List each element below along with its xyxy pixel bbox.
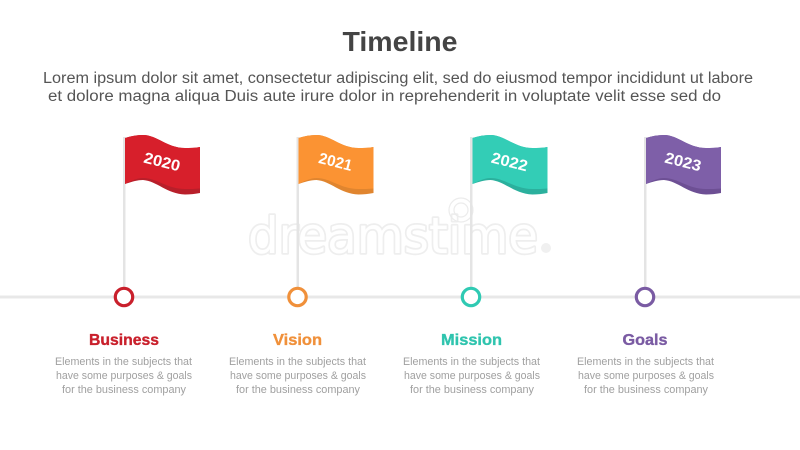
milestone: 2022 Mission	[403, 135, 548, 396]
heading: Business	[89, 332, 159, 349]
description: Elements in the subjects that	[577, 356, 714, 368]
flag 2021	[298, 135, 374, 194]
description: for the business company	[236, 384, 360, 396]
flag pole	[123, 137, 126, 287]
flag pole	[296, 137, 299, 287]
description: Elements in the subjects that	[229, 356, 366, 368]
heading: Goals	[622, 332, 668, 349]
description: for the business company	[62, 384, 186, 396]
flag 2022: 2022	[489, 150, 529, 175]
flag pole	[644, 137, 646, 287]
milestone: 2021 Vision	[229, 135, 374, 396]
marker	[462, 288, 480, 306]
milestone: 2020 Business	[55, 135, 200, 396]
heading: Vision	[273, 332, 322, 349]
description: have some purposes & goals	[404, 370, 540, 382]
description	[229, 356, 366, 396]
intro text	[43, 70, 753, 105]
flag 2021: 2021	[317, 150, 354, 175]
description	[403, 356, 540, 396]
description: Elements in the subjects that	[403, 356, 540, 368]
description: for the business company	[410, 384, 534, 396]
description: have some purposes & goals	[230, 370, 366, 382]
heading: Mission	[441, 332, 502, 349]
flag 2020	[125, 135, 200, 194]
flag 2023	[646, 135, 721, 194]
description: have some purposes & goals	[578, 370, 714, 382]
flag pole	[470, 137, 472, 287]
description: have some purposes & goals	[56, 370, 192, 382]
description: Elements in the subjects that	[55, 356, 192, 368]
flag 2022	[472, 135, 548, 194]
intro text: Lorem ipsum dolor sit amet, consectetur adipiscing elit, sed do eiusmod tempor incididunt ut labore	[43, 70, 753, 87]
milestone: 2023 Goals	[577, 135, 721, 396]
marker	[115, 288, 133, 306]
timeline line	[0, 296, 800, 298]
title: Timeline	[342, 26, 458, 57]
watermark: dreamstime	[248, 207, 538, 265]
marker	[289, 288, 306, 306]
marker	[636, 288, 654, 306]
flag 2020: 2020	[142, 150, 182, 175]
description: for the business company	[584, 384, 708, 396]
description	[577, 356, 714, 396]
intro text: et dolore magna aliqua Duis aute irure dolor in reprehenderit in voluptate velit esse sed do	[48, 88, 721, 105]
flag 2023: 2023	[663, 150, 703, 175]
description	[55, 356, 192, 396]
